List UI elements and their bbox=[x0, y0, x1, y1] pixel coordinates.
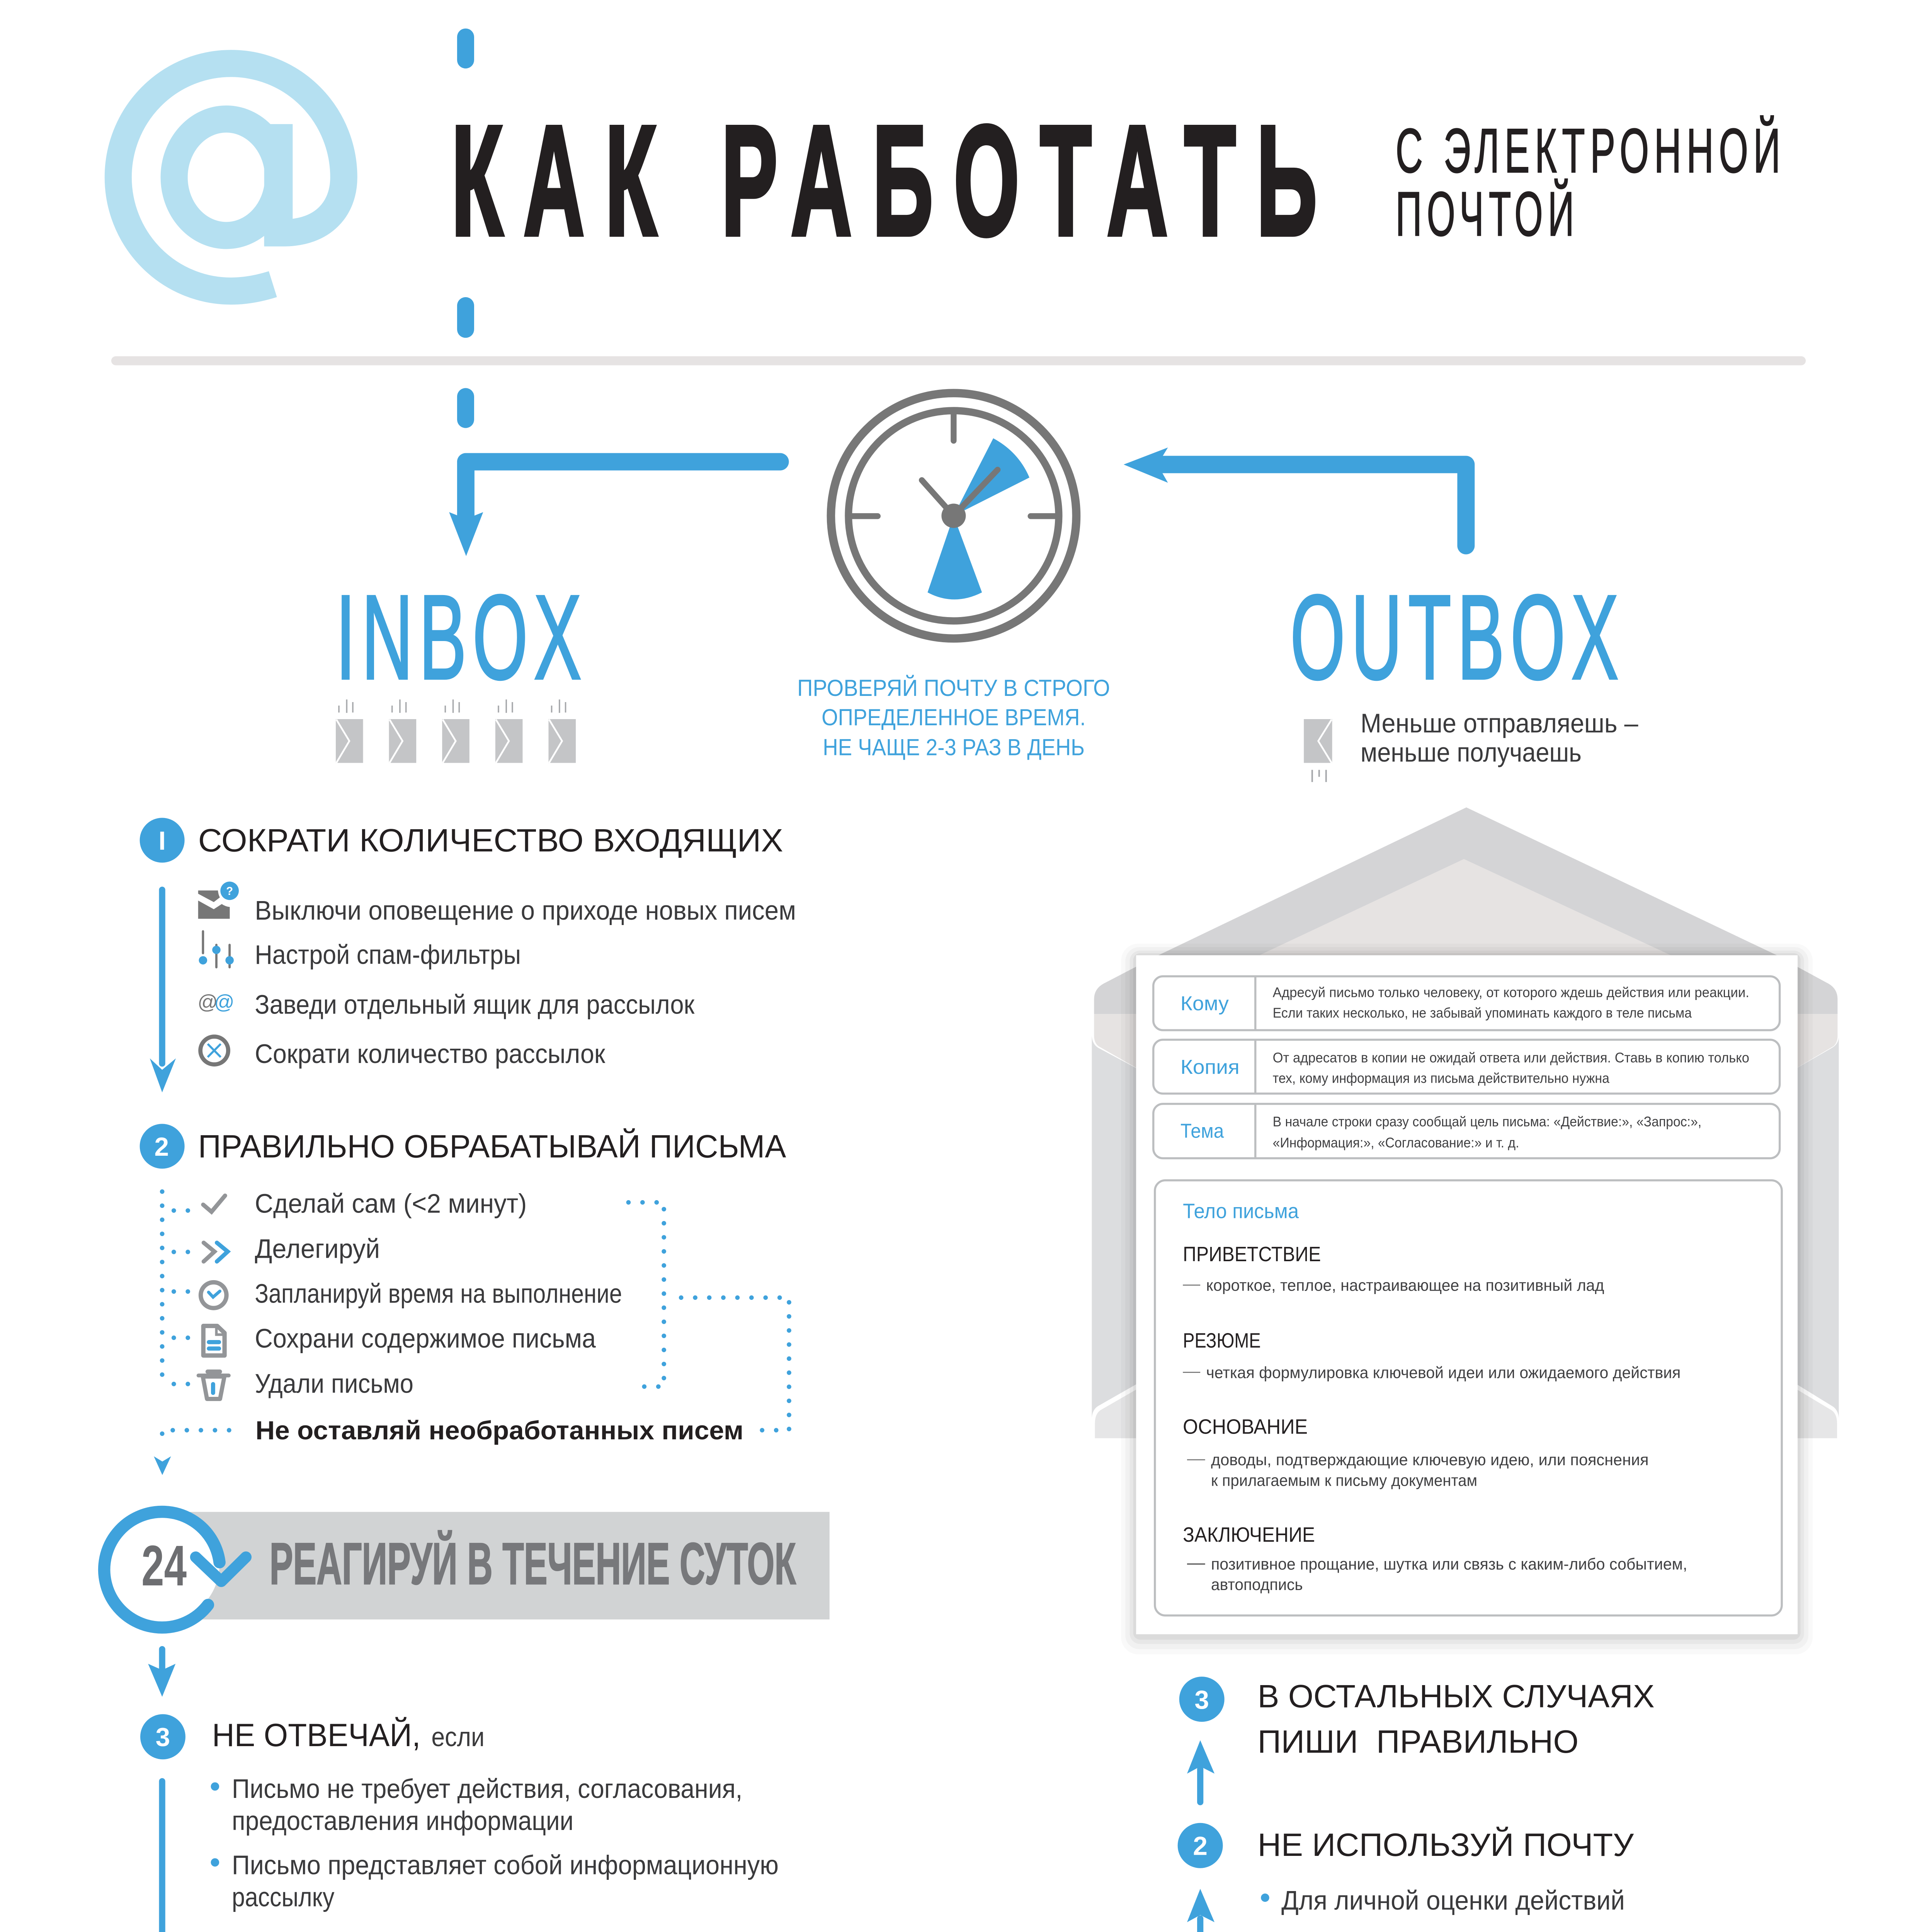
field: to: Если таких несколько, не забывай упоминать каждого в теле письма bbox=[1273, 1005, 1692, 1021]
item text: Делегируй bbox=[255, 1234, 380, 1264]
icon: document bbox=[203, 1326, 225, 1355]
list: рассылку bbox=[232, 1882, 334, 1912]
icon: at sign bbox=[118, 63, 344, 291]
outbox note: Меньше отправляешь – bbox=[1361, 708, 1638, 738]
step 3 bbox=[1179, 1677, 1655, 1760]
item text: Выключи оповещение о приходе новых писем bbox=[255, 895, 796, 925]
field: body: автоподпись bbox=[1211, 1575, 1303, 1594]
field: body: ЗАКЛЮЧЕНИЕ bbox=[1183, 1523, 1315, 1546]
field: body: доводы, подтверждающие ключевую идею, или пояснения bbox=[1211, 1451, 1649, 1469]
icons: inbox envelopes bbox=[336, 699, 576, 763]
list: Письмо не требует действия, согласования, bbox=[232, 1774, 742, 1804]
list: предоставления информации bbox=[232, 1806, 573, 1836]
field: subject: «Информация:», «Согласование:» и т. д. bbox=[1273, 1135, 1519, 1151]
icon: sliders bbox=[199, 931, 234, 967]
outbox note bbox=[1361, 708, 1638, 767]
icon: at signs: @ bbox=[197, 990, 218, 1013]
item text: Настрой спам-фильтры bbox=[255, 939, 521, 969]
icon: cancel bbox=[201, 1037, 228, 1065]
banner: react in 24 hours: РЕАГИРУЙ В ТЕЧЕНИЕ СУТОК bbox=[270, 1531, 796, 1597]
section: outbox steps bbox=[1178, 1677, 1828, 1932]
dotted routing bbox=[154, 1192, 789, 1475]
field: to: Адресуй письмо только человеку, от которого ждешь действия или реакции. bbox=[1273, 985, 1749, 1000]
step 2 bbox=[1178, 1823, 1655, 1932]
clock caption: ОПРЕДЕЛЕННОЕ ВРЕМЯ. bbox=[822, 704, 1086, 730]
badge bbox=[140, 1714, 185, 1759]
field: subject bbox=[1153, 1104, 1780, 1158]
icon: envelope question bbox=[198, 882, 239, 919]
icon: trash bbox=[199, 1372, 229, 1399]
list: Письмо представляет собой информационную bbox=[232, 1850, 779, 1880]
field: body: позитивное прощание, шутка или связь с каким-либо событием, bbox=[1211, 1555, 1687, 1573]
icon: at signs bbox=[197, 990, 234, 1013]
clock caption: ПРОВЕРЯЙ ПОЧТУ В СТРОГО bbox=[797, 674, 1110, 701]
badge: I bbox=[158, 827, 166, 855]
arrow head: outbox bbox=[1124, 447, 1168, 483]
bullets bbox=[211, 1782, 219, 1932]
field: body: Тело письма bbox=[1183, 1200, 1299, 1223]
step 3: 3 bbox=[1194, 1685, 1209, 1714]
list bbox=[232, 1774, 779, 1932]
arrow head: inbox bbox=[449, 512, 483, 556]
field: to: Кому bbox=[1180, 992, 1229, 1014]
step 2: Для личной оценки действий bbox=[1281, 1885, 1625, 1915]
field: subject: В начале строки сразу сообщай цель письма: «Действие:», «Запрос:», bbox=[1273, 1114, 1701, 1129]
heading: outbox: OUTBOX bbox=[1290, 570, 1624, 704]
banner: react in 24 hours: 24 bbox=[141, 1534, 187, 1598]
arrow up bbox=[1187, 1889, 1214, 1932]
field: body: к прилагаемым к письму документам bbox=[1211, 1471, 1477, 1489]
step 2: НЕ ИСПОЛЬЗУЙ ПОЧТУ bbox=[1258, 1827, 1634, 1863]
field: body: короткое, теплое, настраивающее на позитивный лад bbox=[1206, 1276, 1604, 1294]
field: body: РЕЗЮМЕ bbox=[1183, 1329, 1261, 1352]
arrow: to section 3 bbox=[148, 1649, 175, 1697]
heading: если bbox=[431, 1722, 485, 1752]
section: inbox 1 bbox=[140, 818, 796, 1092]
icon: scheduled bbox=[201, 1282, 226, 1308]
section: do not reply bbox=[140, 1714, 779, 1932]
badge bbox=[140, 1124, 185, 1169]
section: inbox 2 bbox=[140, 1124, 789, 1475]
field: subject: Тема bbox=[1180, 1119, 1224, 1142]
item text: Сохрани содержимое письма bbox=[255, 1323, 596, 1353]
dashed vertical line top bbox=[457, 29, 474, 428]
heading: СОКРАТИ КОЛИЧЕСТВО ВХОДЯЩИХ bbox=[198, 823, 783, 859]
title: ПОЧТОЙ bbox=[1396, 179, 1579, 249]
item text: Заведи отдельный ящик для рассылок bbox=[255, 989, 695, 1019]
item text: Удали письмо bbox=[255, 1369, 413, 1399]
item text: Запланируй время на выполнение bbox=[255, 1278, 622, 1308]
field: copy: От адресатов в копии не ожидай ответа или действия. Ставь в копию только bbox=[1273, 1049, 1749, 1065]
field: body bbox=[1155, 1180, 1782, 1616]
icon: check bbox=[203, 1196, 225, 1212]
outbox note: меньше получаешь bbox=[1361, 737, 1582, 767]
badge: 2 bbox=[155, 1133, 169, 1162]
badge: 3 bbox=[156, 1723, 170, 1752]
step 3: ПИШИ ПРАВИЛЬНО bbox=[1258, 1724, 1579, 1760]
icon: outbox envelope bbox=[1304, 719, 1332, 782]
arrow: to inbox bbox=[466, 462, 780, 518]
heading: НЕ ОТВЕЧАЙ, bbox=[212, 1717, 420, 1753]
bold rule: Не оставляй необработанных писем bbox=[255, 1416, 743, 1445]
arrow: from outbox bbox=[1154, 464, 1466, 546]
clock caption bbox=[797, 674, 1110, 760]
field: body: четкая формулировка ключевой идеи или ожидаемого действия bbox=[1206, 1363, 1681, 1381]
item text: Сделай сам (<2 минут) bbox=[255, 1188, 527, 1218]
field: body: ПРИВЕТСТВИЕ bbox=[1183, 1243, 1321, 1266]
icon: envelope question: ? bbox=[226, 885, 233, 898]
step 3: В ОСТАЛЬНЫХ СЛУЧАЯХ bbox=[1258, 1679, 1655, 1714]
clock bbox=[831, 393, 1076, 638]
arrow up bbox=[1187, 1740, 1214, 1802]
heading: inbox: INBOX bbox=[336, 570, 587, 704]
badge bbox=[140, 818, 185, 863]
clock caption: НЕ ЧАЩЕ 2-3 РАЗ В ДЕНЬ bbox=[823, 734, 1085, 760]
field: to bbox=[1153, 976, 1780, 1030]
icon: delegate bbox=[204, 1243, 228, 1262]
field: copy: тех, кому информация из письма действительно нужна bbox=[1273, 1070, 1609, 1086]
field: copy: Копия bbox=[1180, 1056, 1240, 1078]
panel: envelope back bbox=[1092, 808, 1839, 1438]
field: body: ОСНОВАНИЕ bbox=[1183, 1415, 1308, 1438]
banner: react in 24 hours bbox=[104, 1507, 830, 1628]
arrow bbox=[148, 1781, 175, 1932]
panel: letter bbox=[1121, 944, 1813, 1655]
step 2: 2 bbox=[1193, 1832, 1208, 1861]
item text: Сократи количество рассылок bbox=[255, 1039, 606, 1069]
icon: at signs: @ bbox=[214, 990, 234, 1013]
heading: ПРАВИЛЬНО ОБРАБАТЫВАЙ ПИСЬМА bbox=[198, 1129, 786, 1165]
arrow bbox=[150, 890, 176, 1092]
field: copy bbox=[1153, 1040, 1780, 1094]
